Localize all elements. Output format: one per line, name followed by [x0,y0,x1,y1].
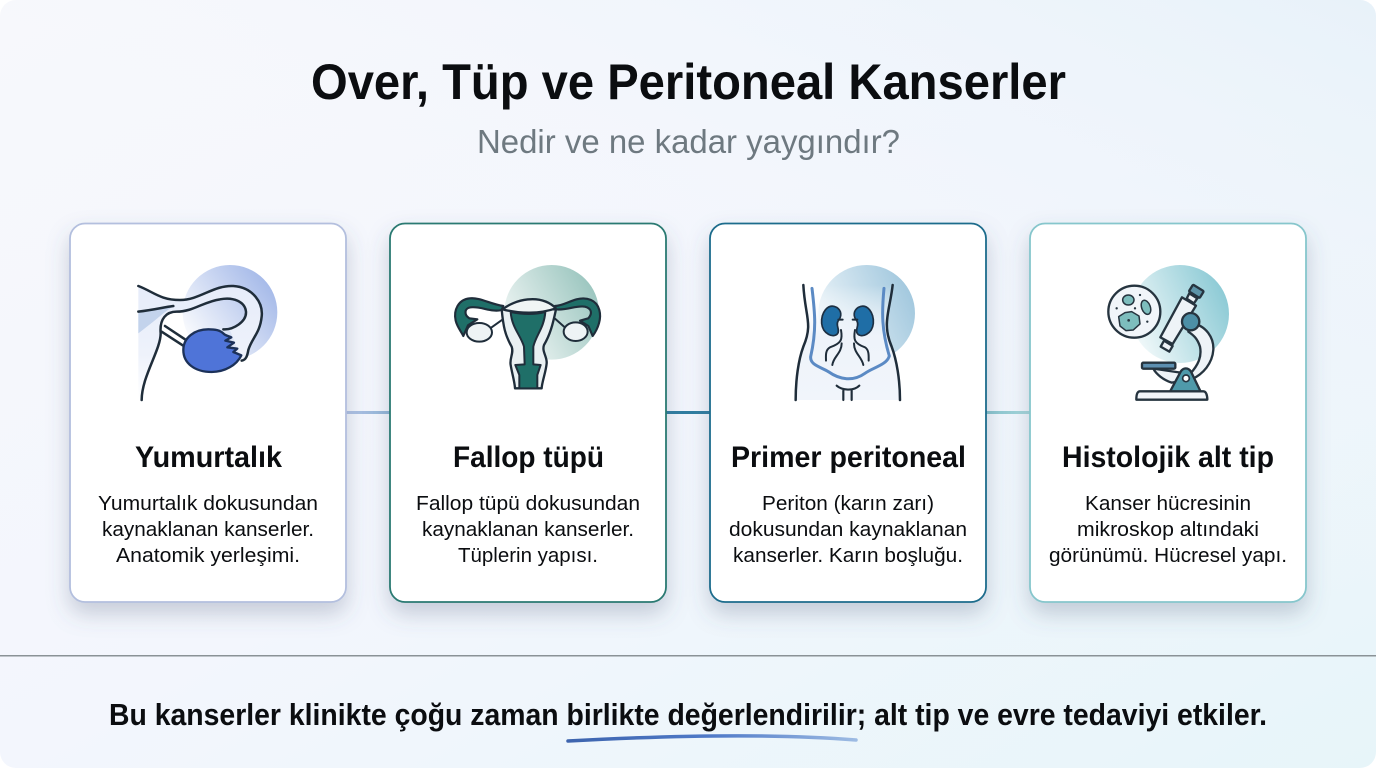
panel: Histolojik alt tip [1030,224,1306,602]
connector: card 3 to card 4 [985,411,1031,414]
description: Kanser hücresinin [1085,493,1251,515]
description: kaynaklanan kanserler. [422,519,634,541]
description: görünümü. Hücresel yapı. [1049,545,1287,567]
description: Periton (karın zarı) [762,493,934,515]
description: Anatomik yerleşimi. [116,545,300,567]
description [98,493,318,567]
heading: Fallop tüpü [453,441,604,474]
description: Fallop tüpü dokusundan [416,493,640,515]
description: mikroskop altındaki [1077,519,1259,541]
underline highlight [568,736,856,741]
description: dokusundan kaynaklanan [729,519,967,541]
connector: card 1 to card 2 [345,411,391,414]
icon: uterus and fallopian tubes [455,265,600,388]
icon: microscope and cells [1108,265,1229,400]
panel: Yumurtalık [70,224,346,602]
description [1049,493,1287,567]
description: kaynaklanan kanserler. [102,519,314,541]
subtitle: Nedir ve ne kadar yaygındır? [477,123,900,160]
connector: card 2 to card 3 [665,411,711,414]
icon: ovary [138,265,277,400]
description: kanserler. Karın boşluğu. [733,545,963,567]
description: Yumurtalık dokusundan [98,493,318,515]
icon: abdomen with peritoneum and kidneys [796,265,915,400]
panel: Primer peritoneal [710,224,986,602]
takeaway sentence: Bu kanserler klinikte çoğu zaman birlikte değerlendirilir; alt tip ve evre tedaviyi etkiler. [109,697,1267,732]
description [729,493,967,567]
description: Tüplerin yapısı. [458,545,598,567]
heading: Yumurtalık [135,441,282,474]
heading: Primer peritoneal [731,441,966,474]
heading: Histolojik alt tip [1062,441,1274,474]
description [416,493,640,567]
title: Over, Tüp ve Peritoneal Kanserler [311,54,1066,110]
panel: Fallop tüpü [390,224,666,602]
